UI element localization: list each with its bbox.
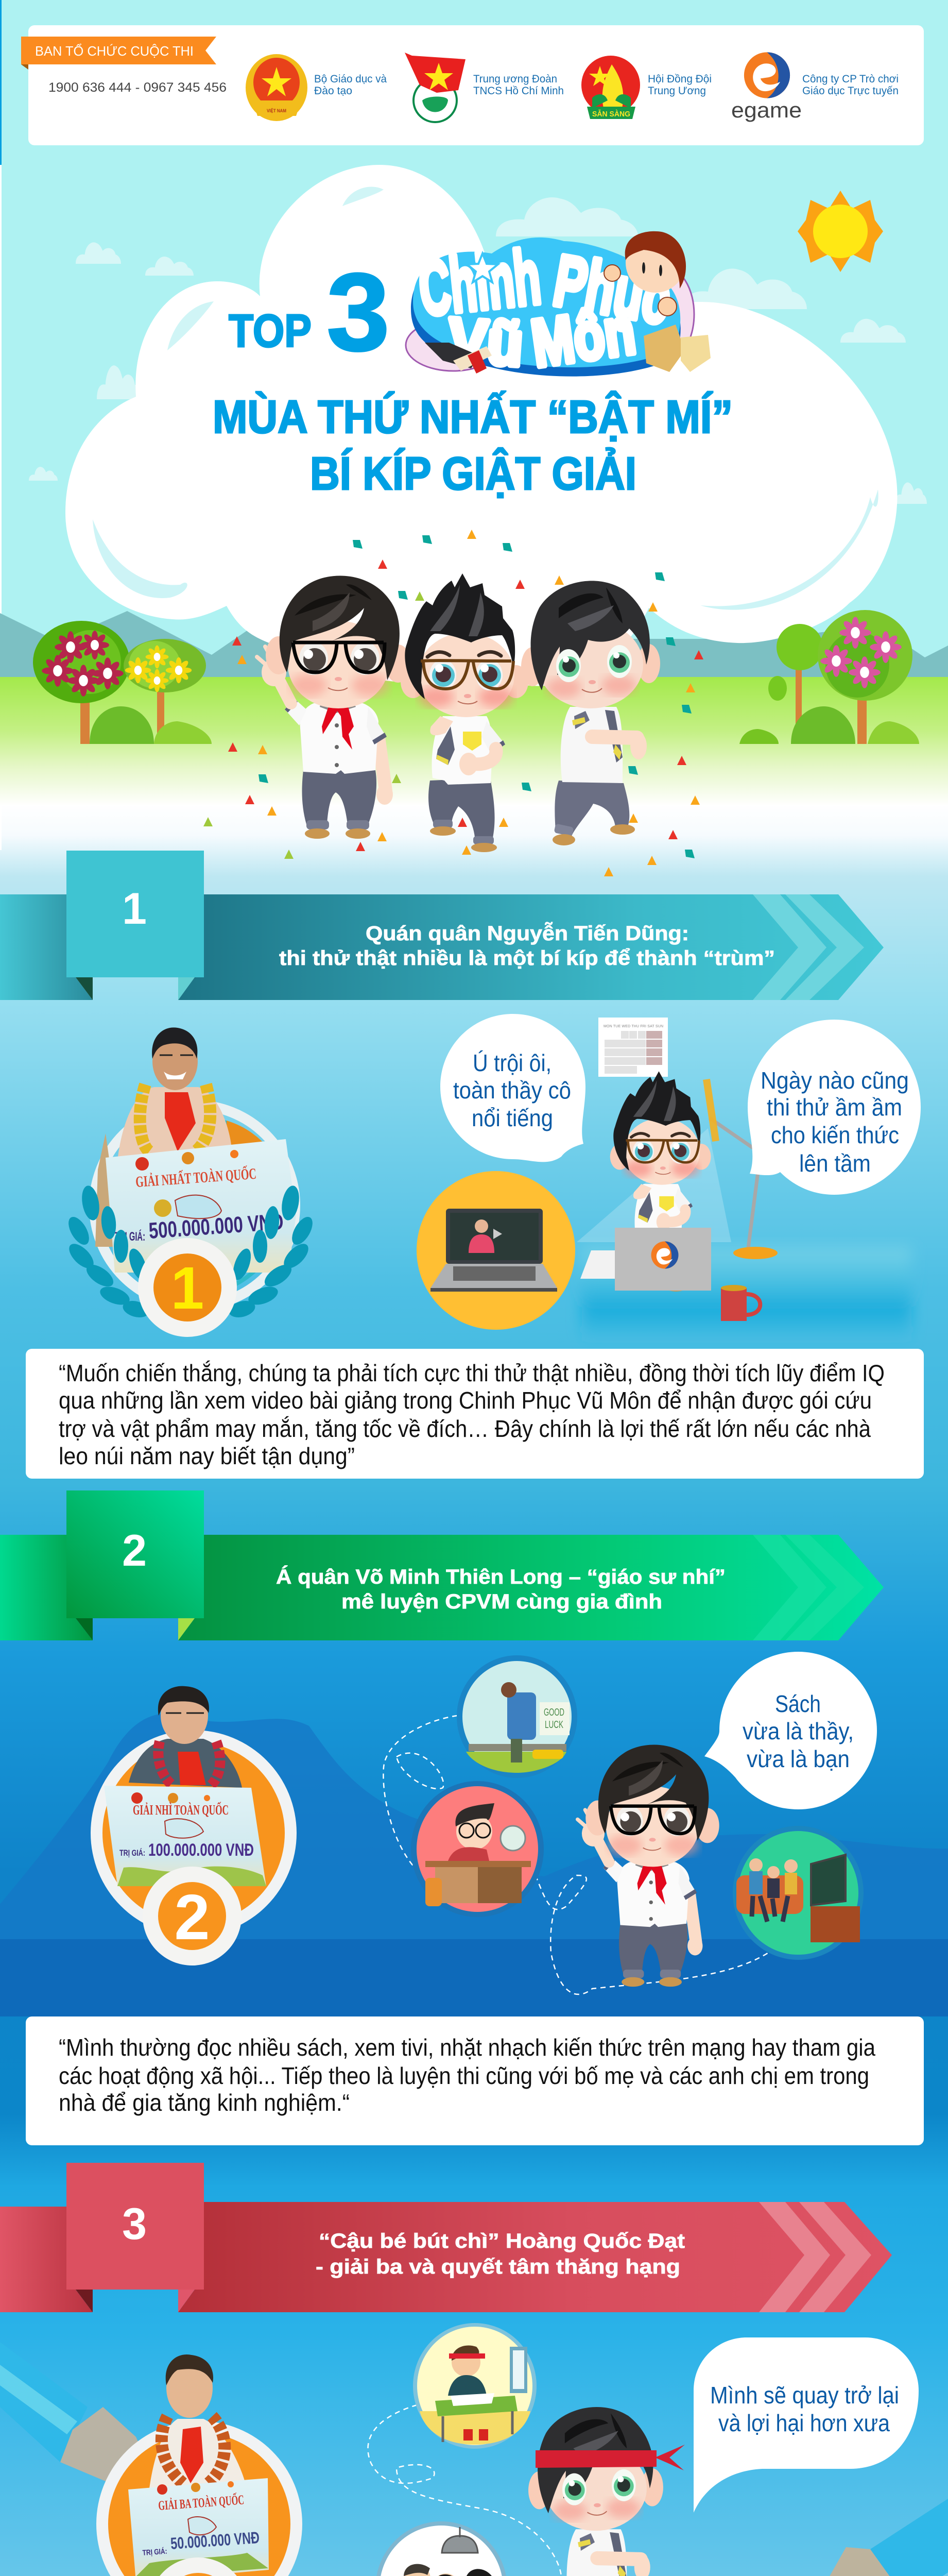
section 3 ribbon: 3	[122, 2199, 147, 2249]
organizer name 4: Công ty CP Trò chơi	[802, 73, 899, 85]
circle: group study	[375, 2521, 507, 2576]
section 3 winner photo medal: 50.000.000 VNĐ	[170, 2528, 260, 2553]
quote box 1	[26, 1349, 924, 1479]
section 1 ribbon: thi thử thật nhiều là một bí kíp để thành “trùm”	[279, 947, 775, 970]
section 2 winner photo medal: 2	[175, 1882, 210, 1953]
circle: backpack good luck: GOOD	[544, 1707, 564, 1718]
speech bubble: teachers: nổi tiếng	[472, 1105, 553, 1131]
title: main heading: BÍ KÍP GIẬT GIẢI	[310, 447, 636, 500]
quote box 2: nhà để gia tăng kinh nghiệm.“	[59, 2089, 350, 2116]
section 2 winner photo medal: GIẢI NHÌ TOÀN QUỐC	[133, 1802, 229, 1818]
section 3 winner photo medal	[96, 2354, 302, 2576]
section 1 winner photo medal: TRỊ GIÁ:	[115, 1229, 145, 1244]
title: top 3: 3	[326, 250, 390, 374]
calendar: MON TUE WED THU FRI SAT SUN	[604, 1025, 663, 1028]
organizer name 2: Trung ương Đoàn	[473, 73, 557, 85]
logo: egame: egame	[731, 98, 802, 122]
section 2 ribbon: mê luyện CPVM cùng gia đình	[341, 1590, 662, 1613]
logo: Chinh Phuc Vu Mon: Môn	[527, 292, 640, 381]
quote box 1: qua những lần xem video bài giảng trong Chinh Phục Vũ Môn để nhận được gói cứu	[59, 1387, 872, 1414]
speech bubble: daily tests: lên tầm	[799, 1150, 871, 1177]
quote box 2	[26, 2016, 924, 2145]
title: main heading	[213, 391, 733, 500]
illustration: trees left	[33, 621, 212, 744]
speech bubble: comeback	[694, 2337, 919, 2513]
quote box 2: các hoạt động xã hội... Tiếp theo là luyện thi cũng với bố mẹ và các anh chị em trong	[59, 2062, 869, 2089]
circle: backpack good luck: LUCK	[545, 1719, 563, 1731]
section 3 ribbon: - giải ba và quyết tâm thăng hạng	[316, 2256, 680, 2278]
section 3 ribbon	[0, 2163, 892, 2312]
logo: Chinh Phuc Vu Mon	[406, 231, 711, 381]
laptop back with logo	[615, 1228, 711, 1291]
organizer ribbon	[21, 37, 216, 70]
logo: Chinh Phuc Vu Mon: Phục	[548, 240, 677, 340]
speech bubble: comeback: Mình sẽ quay trở lại	[710, 2382, 899, 2409]
speech bubble: books: vừa là thầy,	[743, 1718, 854, 1744]
yellow circle with video lesson laptop	[417, 1171, 575, 1330]
circle: student at desk	[411, 1781, 544, 1917]
logo: Chinh Phuc Vu Mon: Vũ	[446, 305, 525, 379]
section 1 ribbon	[0, 851, 884, 1000]
confetti	[203, 530, 703, 876]
logo: young pioneers: SẴN SÀNG	[592, 110, 630, 118]
section 3 ribbon: “Cậu bé bút chì” Hoàng Quốc Đạt	[319, 2230, 685, 2252]
organizer ribbon: BAN TỔ CHỨC CUỘC THI	[35, 43, 194, 59]
dashed flight paths	[383, 1716, 772, 1994]
title: main heading: MÙA THỨ NHẤT “BẬT MÍ”	[213, 391, 733, 443]
organizer name 4	[802, 73, 899, 97]
organizer name 1: Đào tạo	[314, 85, 352, 97]
hotline: 1900 636 444 - 0967 345 456	[48, 80, 227, 95]
speech bubble: daily tests: cho kiến thức	[771, 1122, 899, 1148]
section 1 winner photo medal: 1	[171, 1255, 204, 1321]
speech bubble: books: vừa là bạn	[747, 1745, 850, 1772]
section 2 ribbon: 2	[122, 1526, 147, 1575]
section 2 ribbon	[0, 1490, 884, 1640]
section 1 ribbon: Quán quân Nguyễn Tiến Dũng:	[366, 921, 689, 945]
organizer name 1	[314, 73, 387, 97]
organizer name 2	[473, 73, 564, 97]
speech bubble: daily tests: thi thử ầm ầm	[767, 1094, 902, 1121]
section 2 winner photo medal	[91, 1686, 297, 1965]
small background clouds	[29, 197, 927, 504]
circle: family watching TV	[733, 1826, 864, 1960]
organizer name 1: Bộ Giáo dục và	[314, 73, 387, 85]
section 1 winner photo medal: 500.000.000 VNĐ	[148, 1209, 284, 1244]
logo: young pioneers	[581, 56, 640, 119]
characters: three chibi students	[257, 573, 660, 852]
quote box 1: trợ và vật phẩm may mắn, tăng tốc về đích… Đây chính là lợi thế rất lớn nếu các nhà	[59, 1415, 871, 1442]
speech bubble: daily tests: Ngày nào cũng	[761, 1067, 909, 1094]
organizer name 4: Giáo dục Trực tuyến	[802, 85, 899, 97]
character: boy with red headband	[528, 2407, 685, 2576]
section 2 winner photo medal: 100.000.000 VNĐ	[148, 1840, 254, 1860]
circle: backpack good luck	[457, 1655, 577, 1778]
grass field	[0, 677, 948, 806]
organizer name 3: Hội Đồng Đội	[648, 73, 712, 85]
logo: Chinh Phuc Vu Mon: Chinh	[415, 233, 544, 332]
section 2 background mountains	[0, 1713, 948, 2016]
section 1 ribbon: 1	[122, 884, 147, 934]
quote box 1: “Muốn chiến thắng, chúng ta phải tích cực thi thử thật nhiều, đồng thời tích lũy điểm IQ	[59, 1360, 885, 1386]
speech bubble: teachers: toàn thầy cô	[453, 1077, 571, 1104]
mug	[721, 1285, 760, 1321]
section 3 winner photo medal: TRỊ GIÁ:	[142, 2547, 167, 2557]
mountains	[0, 611, 948, 680]
circle: studying alone	[413, 2323, 537, 2449]
section 1 winner photo medal: GIẢI NHẤT TOÀN QUỐC	[135, 1165, 257, 1191]
speech bubble: teachers: Ú trội ôi,	[473, 1049, 551, 1076]
illustration: trees right	[739, 610, 919, 744]
character: black glasses boy waving	[578, 1744, 719, 1987]
calendar	[598, 1018, 668, 1077]
section 1 winner photo medal	[64, 1027, 317, 1337]
speech bubble: comeback: và lợi hại hơn xưa	[718, 2410, 890, 2436]
dashed flight path	[368, 2405, 561, 2576]
speech bubble: books	[704, 1652, 877, 1809]
logo: youth union	[405, 53, 466, 122]
section 1 desk scene	[577, 1079, 911, 1345]
speech bubble: teachers	[440, 1014, 585, 1162]
organizer name 3: Trung Ương	[648, 85, 706, 97]
decorative pencils	[0, 2342, 948, 2576]
logo: ministry of education: VIỆT NAM	[267, 108, 286, 113]
speech bubble: books: Sách	[775, 1690, 821, 1717]
organizer name 2: TNCS Hồ Chí Minh	[473, 85, 564, 97]
logo: egame	[731, 52, 802, 122]
quote box 1: leo núi năm nay biết tận dụng”	[59, 1443, 355, 1469]
section 2 ribbon: Á quân Võ Minh Thiên Long – “giáo sư nhí”	[276, 1565, 726, 1588]
title: top 3: TOP	[229, 306, 312, 357]
logo: ministry of education	[246, 54, 307, 121]
main white cloud	[65, 165, 897, 686]
quote box 2: “Mình thường đọc nhiều sách, xem tivi, nhặt nhạch kiến thức trên mạng hay tham gia	[59, 2034, 875, 2061]
organizer header panel	[21, 25, 924, 145]
title: top 3	[229, 250, 390, 374]
organizer name 3	[648, 73, 712, 97]
speech bubble: daily tests	[748, 1020, 921, 1195]
section 2 winner photo medal: TRỊ GIÁ:	[119, 1848, 145, 1858]
keyboard	[580, 1250, 615, 1279]
icon: sun	[798, 191, 883, 272]
character: spiky hair student at desk	[610, 1071, 711, 1292]
section 3 winner photo medal: GIẢI BA TOÀN QUỐC	[158, 2492, 245, 2513]
